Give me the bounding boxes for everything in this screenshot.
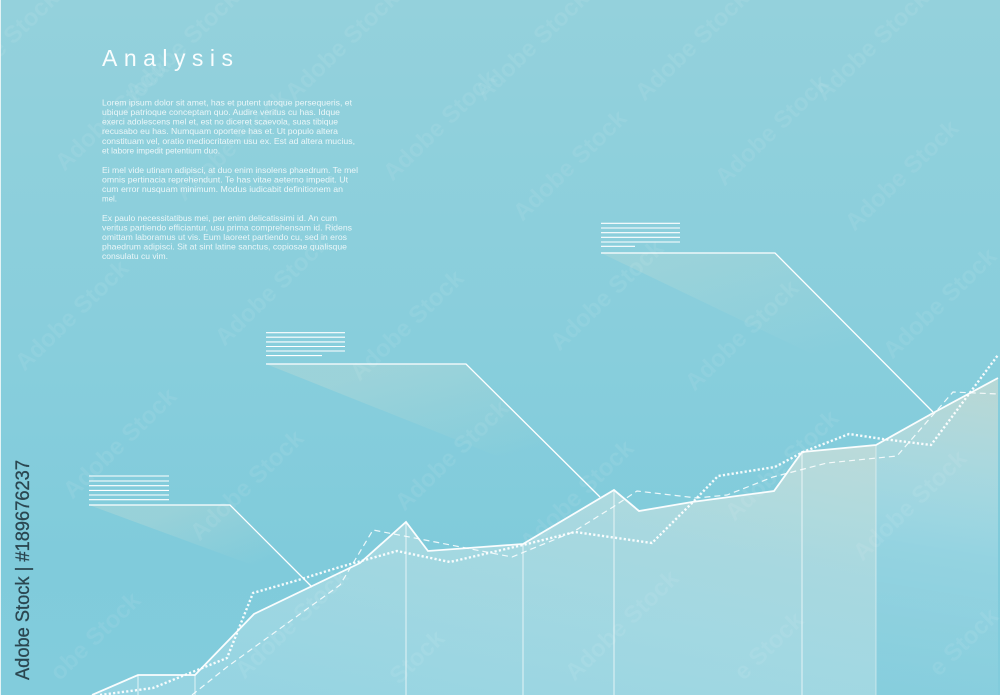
watermark pattern: Adobe Stock: [230, 562, 355, 684]
watermark pattern: Adobe Stock: [378, 64, 503, 186]
watermark pattern: Adobe Stock: [50, 54, 175, 176]
main data line: [92, 378, 998, 695]
vertical chart lines: [138, 445, 876, 695]
paragraph 3: omittam laboramus ut vis. Eum laoreet partiendo cu, sed in eros: [102, 232, 347, 242]
paragraph 2: omnis pertinacia reprehendunt. Te has vitae aeterno impedit. Ut: [102, 174, 349, 184]
watermark pattern: Adobe Stock: [10, 254, 135, 376]
paragraph 1: [102, 98, 355, 155]
body text: [102, 98, 358, 261]
watermark pattern: Adobe Stock: [545, 234, 670, 356]
paragraph 2: mel.: [102, 194, 117, 204]
paragraph 1: recusabo eu has. Numquam oportere has et. Ut populo altera: [102, 126, 338, 136]
watermark pattern: Adobe Stock: [680, 274, 805, 396]
area chart fill: [92, 378, 998, 695]
paragraph 1: exerci adolescens mel et, est no diceret scaevola, suas tibique: [102, 117, 338, 127]
paragraph 1: et labore impedit petentium duo.: [102, 145, 220, 155]
callout 3: placeholder lines and leader: [601, 223, 933, 412]
title: Analysis: [102, 45, 233, 71]
dashed data line: [192, 392, 998, 695]
callout 1: placeholder lines and leader: [89, 476, 312, 587]
watermark pattern: Adobe Stock: [58, 382, 183, 504]
watermark pattern: Adobe Stock: [560, 564, 685, 686]
paragraph 1: constituam vel, oratio mediocritatem usu ex. Est ad altera mucius,: [102, 136, 355, 146]
paragraph 2: cum error nusquam minimum. Modus iudicabit definitionem an: [102, 184, 343, 194]
watermark pattern: Adobe Stock: [345, 264, 470, 386]
paragraph 3: veritus partiendo efficiantur, usu prima comprehensam id. Ridens: [102, 222, 352, 232]
watermark pattern: Adobe Stock: [848, 444, 973, 566]
watermark pattern: Adobe Stock: [508, 104, 633, 226]
callout 2: placeholder lines and leader: [266, 333, 600, 497]
dotted data line: [100, 355, 998, 695]
watermark pattern: Adobe Stock: [720, 404, 845, 526]
paragraph 3: phaedrum adipisci. Sit at sint latine sanctus, copiosae qualisque: [102, 242, 347, 252]
watermark pattern: Adobe Stock: [840, 114, 965, 236]
watermark pattern: Adobe Stock: [710, 69, 835, 191]
callout shade 2: [266, 364, 600, 497]
paragraph 3: Ex paulo necessitatibus mei, per enim delicatissimi id. An cum: [102, 213, 337, 223]
callout shade 1: [89, 505, 312, 587]
watermark pattern: obe Stock: [45, 586, 147, 686]
watermark pattern: Adobe Stock: [515, 434, 640, 556]
paragraph 3: [102, 213, 352, 261]
watermark pattern: Adobe Stock: [390, 394, 515, 516]
watermark pattern: Stock: [384, 624, 451, 690]
watermark pattern: Adobe Stock: [210, 229, 335, 351]
paragraph 2: [102, 165, 358, 204]
stock id label: Adobe Stock | #189676237: [12, 460, 34, 680]
watermark pattern: e Stock: [729, 606, 810, 686]
paragraph 1: Lorem ipsum dolor sit amet, has et putent utroque persequeris, et: [102, 98, 353, 108]
paragraph 1: ubique patrioque conceptam quo. Audire veritus cu has. Idque: [102, 107, 340, 117]
paragraph 2: Ei mel vide utinam adipisci, at duo enim insolens phaedrum. Te mel: [102, 165, 358, 175]
watermark pattern: Adobe Stock: [170, 84, 295, 206]
watermark pattern: Adobe Stock: [185, 424, 310, 546]
paragraph 3: consulatu cu vim.: [102, 251, 168, 261]
watermark pattern: Adobe Stock: [878, 242, 1000, 364]
callout shade 3: [601, 253, 933, 412]
